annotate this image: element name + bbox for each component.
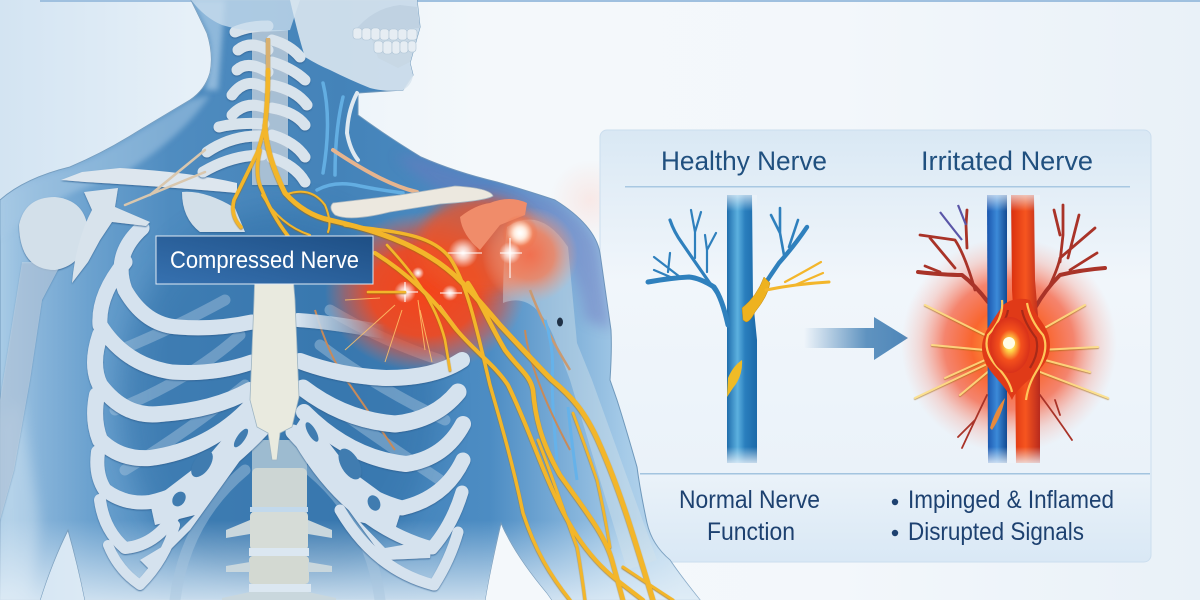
callout: Compressed Nerve: Compressed Nerve bbox=[170, 247, 359, 274]
lumbar spine bbox=[222, 440, 336, 600]
shoulder side pink tint bbox=[550, 160, 630, 240]
top edge strip bbox=[40, 0, 1200, 2]
skull and jaw bbox=[191, 0, 420, 91]
caption: Irritated nerve effects bbox=[892, 486, 1114, 546]
back ribs bbox=[115, 300, 445, 600]
caption: Irritated nerve effects: Impinged & Inflamed bbox=[908, 486, 1114, 514]
caption: Normal Nerve Function: Normal Nerve bbox=[679, 486, 820, 514]
right ribs bbox=[292, 320, 463, 585]
body silhouette bbox=[0, 0, 700, 600]
heading: Healthy Nerve: Healthy Nerve bbox=[661, 146, 827, 176]
left shoulder bones bbox=[0, 168, 245, 520]
left ribs bbox=[95, 228, 262, 585]
neck vessels bbox=[125, 83, 417, 205]
callout: Compressed Nerve bbox=[156, 236, 373, 284]
sternum bbox=[250, 240, 299, 460]
cervical spine bbox=[203, 26, 307, 185]
caption: Normal Nerve Function: Function bbox=[707, 518, 795, 546]
irritated nerve illustration bbox=[901, 195, 1117, 463]
panel: healthy vs irritated nerve comparison bbox=[600, 130, 1151, 562]
arrow bbox=[804, 317, 908, 360]
healthy nerve illustration bbox=[648, 195, 829, 463]
nerves bbox=[233, 38, 673, 600]
caption: Normal Nerve Function bbox=[679, 486, 820, 546]
shoulder inflammation glow bbox=[325, 197, 542, 372]
clipped body shading bbox=[0, 0, 720, 600]
caption: Irritated nerve effects: Disrupted Signals bbox=[908, 518, 1084, 546]
heading: Irritated Nerve: Irritated Nerve bbox=[921, 146, 1093, 176]
right clavicle bbox=[331, 186, 493, 218]
humerus and shoulder joint bbox=[315, 199, 657, 570]
sparks bbox=[345, 220, 533, 362]
anatomy: torso and arm illustration bbox=[0, 0, 720, 600]
